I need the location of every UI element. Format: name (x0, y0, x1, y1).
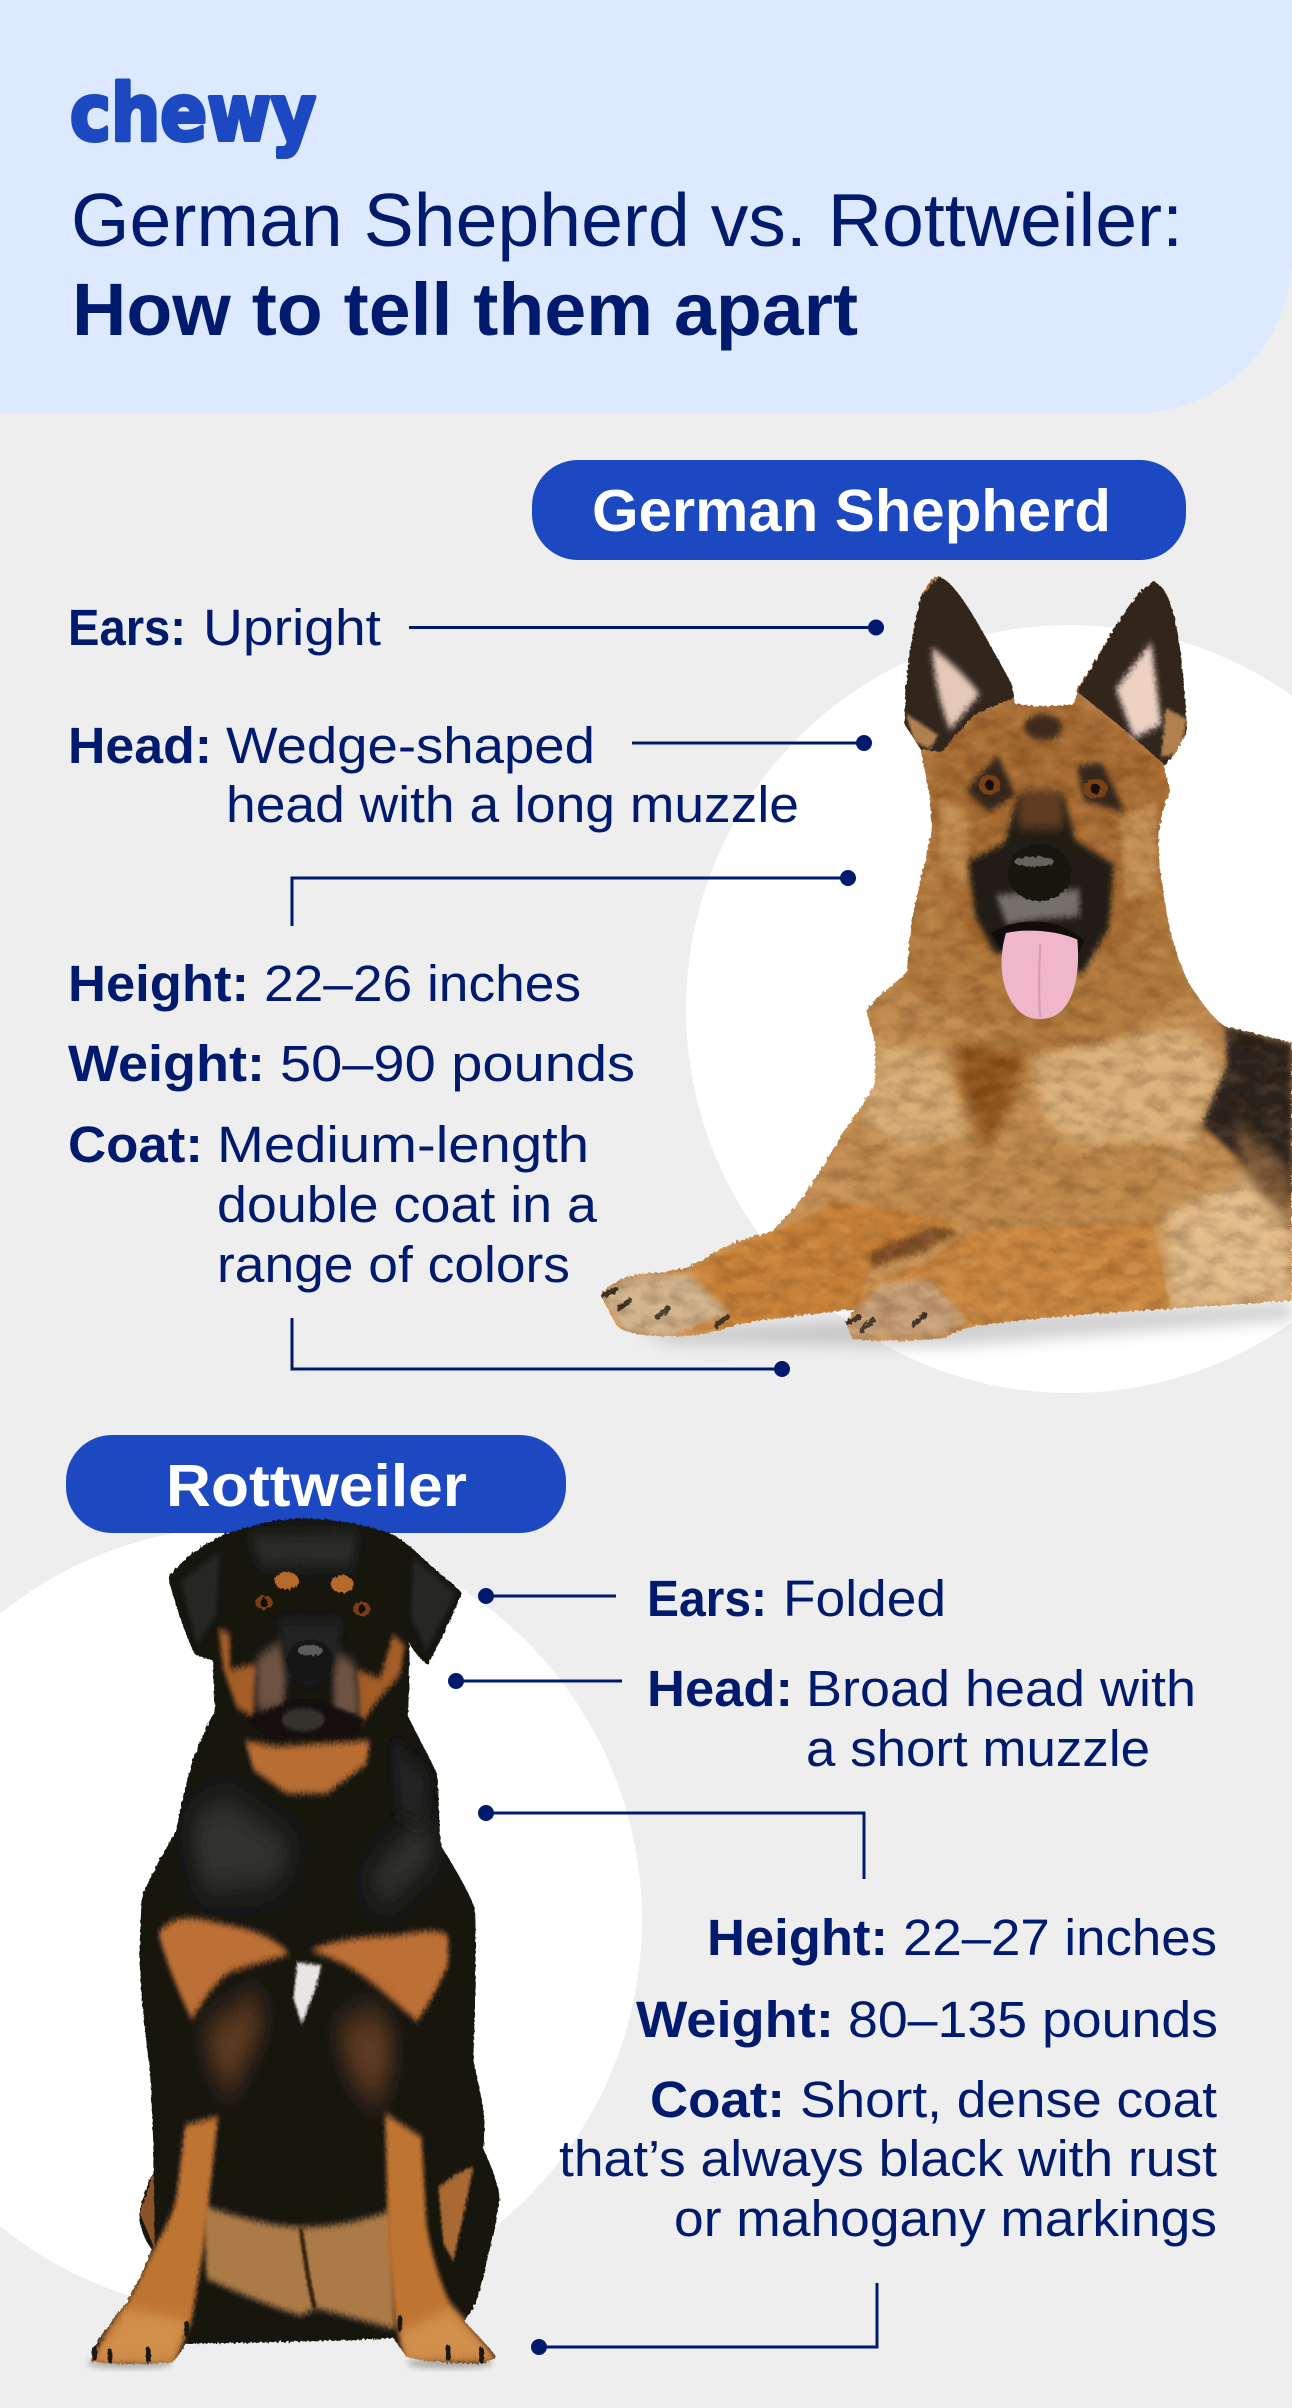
height label: 22–27 inches (903, 1909, 1217, 1966)
head label (68, 717, 799, 833)
shoulder light fur (862, 1043, 971, 1152)
right ear (1077, 582, 1187, 766)
left ear (905, 576, 1015, 752)
logo: chewy: chewy (70, 69, 316, 159)
pill: German Shepherd (532, 460, 1186, 560)
claws (95, 2319, 482, 2359)
arrow: coat bracket (531, 2283, 877, 2355)
eyes (255, 1595, 273, 1610)
weight label: 80–135 pounds (848, 1991, 1218, 2048)
dark brows (966, 755, 1016, 812)
coat label: that’s always black with rust (559, 2130, 1217, 2187)
muzzle grey (996, 889, 1080, 925)
lower chest tan (862, 1141, 1170, 1229)
pill: Rottweiler (66, 1435, 566, 1533)
ear sheen (180, 1551, 220, 1646)
white chest mark (293, 1962, 322, 2024)
illustration: Rottweiler dog (86, 1517, 500, 2372)
left paw (600, 1273, 730, 1336)
shoulder brown right (333, 2007, 397, 2107)
weight label: 50–90 pounds (280, 1035, 635, 1092)
neck ruff (898, 829, 1188, 1054)
title line 1: German Shepherd vs. Rottweiler: (71, 178, 1183, 262)
white circle behind shepherd (686, 625, 1292, 1393)
arrow: height and weight bracket (478, 1805, 864, 1879)
nose (1008, 844, 1071, 901)
left foreleg (90, 2116, 218, 2365)
height label (68, 955, 581, 1012)
coat label: Coat: (650, 2071, 785, 2128)
coat label: range of colors (217, 1236, 570, 1293)
weight label: Weight: (68, 1035, 265, 1092)
ear base fur (1161, 708, 1187, 757)
head label: Broad head with (806, 1660, 1196, 1717)
arrow: height and weight bracket (292, 870, 856, 926)
mouth (247, 1702, 365, 1737)
coat sheen (187, 1794, 300, 1894)
chest light fur (1034, 1026, 1227, 1158)
head (930, 704, 1168, 977)
height label: Height: (707, 1909, 888, 1966)
pill: Rottweiler: Rottweiler (166, 1453, 467, 1519)
coat label: Coat: (68, 1116, 203, 1173)
bridge brown (1018, 790, 1064, 829)
left foreleg (600, 1202, 957, 1336)
brows (275, 1572, 299, 1589)
white circle behind rottweiler (0, 1526, 642, 2314)
far left hind tan (140, 2172, 155, 2249)
leg shadow crease (871, 1226, 957, 1268)
nose bridge (277, 1619, 343, 1684)
arrow: head (448, 1673, 622, 1689)
mouth (991, 922, 1084, 960)
cheek lights (939, 796, 971, 889)
coat label (68, 1116, 598, 1293)
pill: German Shepherd: German Shepherd (592, 478, 1111, 544)
height label (707, 1909, 1217, 1966)
arrow: ears (478, 1588, 616, 1604)
head label: Head: (68, 717, 212, 774)
arrow: head (632, 735, 872, 751)
arrow: coat bracket (292, 1318, 790, 1377)
orange chest centre (952, 1043, 1027, 1152)
ears label: Ears: (68, 599, 186, 656)
title line 2: How to tell them apart (72, 268, 858, 351)
right paw (848, 1279, 966, 1339)
ears label (68, 599, 381, 656)
ears label: Upright (203, 599, 381, 656)
right chest tan (310, 1931, 448, 2021)
tongue (1002, 931, 1078, 1019)
head label: Wedge-shaped (226, 717, 595, 774)
neck tan (245, 1740, 370, 1794)
ears label: Folded (783, 1570, 946, 1627)
height label: Height: (68, 955, 249, 1012)
head label: Head: (647, 1660, 793, 1717)
head label (647, 1660, 1196, 1777)
coat label: double coat in a (217, 1176, 598, 1233)
shoulder brown left (200, 1989, 263, 2095)
left cheek tan (218, 1628, 257, 1717)
forehead mark (1024, 714, 1062, 740)
muzzle mask (968, 796, 1114, 974)
ears label (647, 1570, 946, 1627)
right cheek tan (357, 1634, 405, 1726)
head label: head with a long muzzle (226, 776, 799, 833)
back dark saddle (1202, 1026, 1292, 1196)
coat label: or mahogany markings (674, 2190, 1217, 2247)
inner thighs (203, 2205, 395, 2329)
nose (287, 1640, 333, 1681)
arrow: ears (409, 620, 884, 636)
panel: Rottweiler (0, 1435, 1218, 2408)
right foreleg (848, 1221, 1170, 1339)
jowls (257, 1640, 287, 1711)
weight label (68, 1035, 635, 1092)
claws (603, 1290, 925, 1331)
head label: a short muzzle (806, 1720, 1150, 1777)
coat label (559, 2071, 1217, 2247)
coat label: Short, dense coat (800, 2071, 1217, 2128)
weight label: Weight: (636, 1991, 834, 2048)
right foreleg (385, 2113, 498, 2362)
ears label: Ears: (647, 1570, 767, 1627)
far right hind tan (438, 2166, 473, 2261)
paw highlights (93, 2309, 187, 2362)
panel: German Shepherd (68, 460, 1292, 1420)
hind light (1166, 1180, 1292, 1309)
soft fur texture (602, 580, 1292, 1342)
height label: 22–26 inches (264, 955, 581, 1012)
eyes (979, 775, 1000, 795)
header panel (0, 0, 1292, 414)
left chest tan (158, 1918, 290, 2020)
illustration: German Shepherd dog (601, 576, 1292, 1354)
weight label (636, 1991, 1218, 2048)
coat label: Medium-length (217, 1116, 589, 1173)
